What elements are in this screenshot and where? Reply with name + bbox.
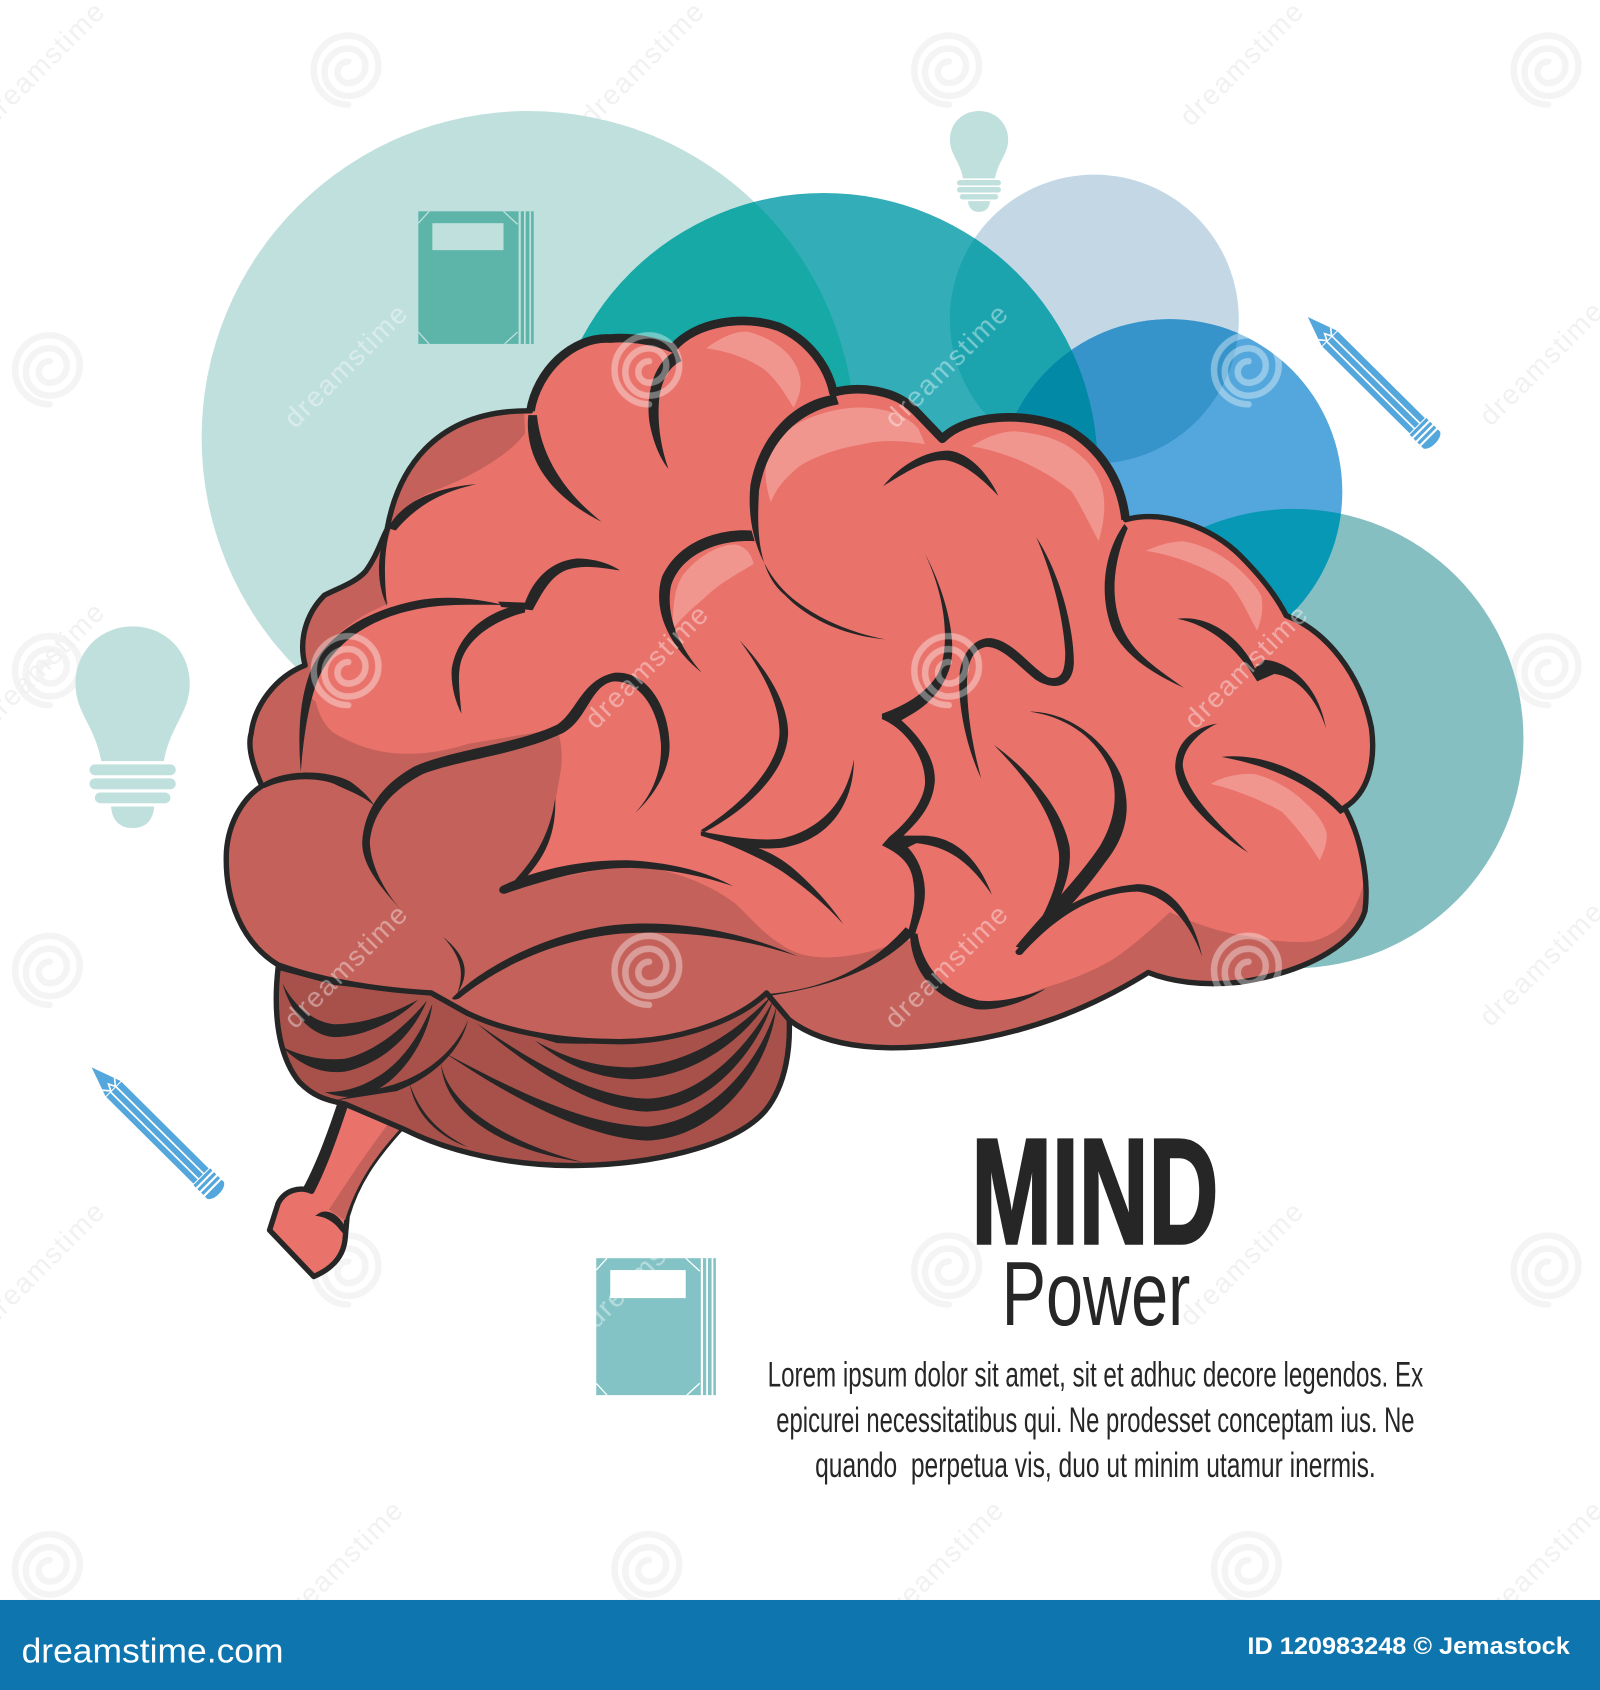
faint watermark text on white: dreamstime [874,1494,1010,1630]
watermark text over artwork: dreamstime [277,297,414,434]
heavier outline on top lobes [530,321,1126,520]
icon: pencil top right [1299,309,1444,452]
icon: book bottom [596,1258,716,1395]
watermark text over artwork: dreamstime [277,897,414,1034]
cerebellum [276,967,789,1166]
icon: book top [418,211,534,344]
watermark text over artwork: dreamstime [578,598,715,734]
faint watermark text on white: dreamstime [273,1494,410,1630]
brain fold lines [262,350,1347,1009]
faint watermark text on white: dreamstime [1173,1195,1310,1332]
watermark text over artwork: dreamstime [878,297,1015,434]
watermark spirals over artwork [314,335,1279,1005]
icon: pencil bottom left [83,1059,227,1202]
subtitle: Power: Power [1002,1244,1190,1345]
brain illustration [226,270,1423,1277]
watermark text over artwork: dreamstime [878,897,1015,1034]
icon: bulb left [75,626,190,828]
footer credit: ID 120983248 © Jemastock [1247,1634,1571,1660]
watermark text over artwork [277,297,1315,1334]
cerebrum light surface [312,325,1370,1001]
brain stem [270,1100,408,1277]
title: MIND: MIND [971,1107,1218,1275]
icon: bulb top [950,111,1008,212]
brain highlights [673,332,1327,860]
footer bar [0,1600,1600,1690]
watermark text over artwork: dreamstime [578,1197,715,1334]
cerebrum outline [226,321,1373,1048]
background circles [202,111,1523,968]
body paragraph [768,1355,1423,1485]
footer logo text: dreamstime.com [22,1633,284,1671]
watermark text over artwork: dreamstime [1178,598,1315,734]
cerebrum shaded base [226,321,1373,1048]
